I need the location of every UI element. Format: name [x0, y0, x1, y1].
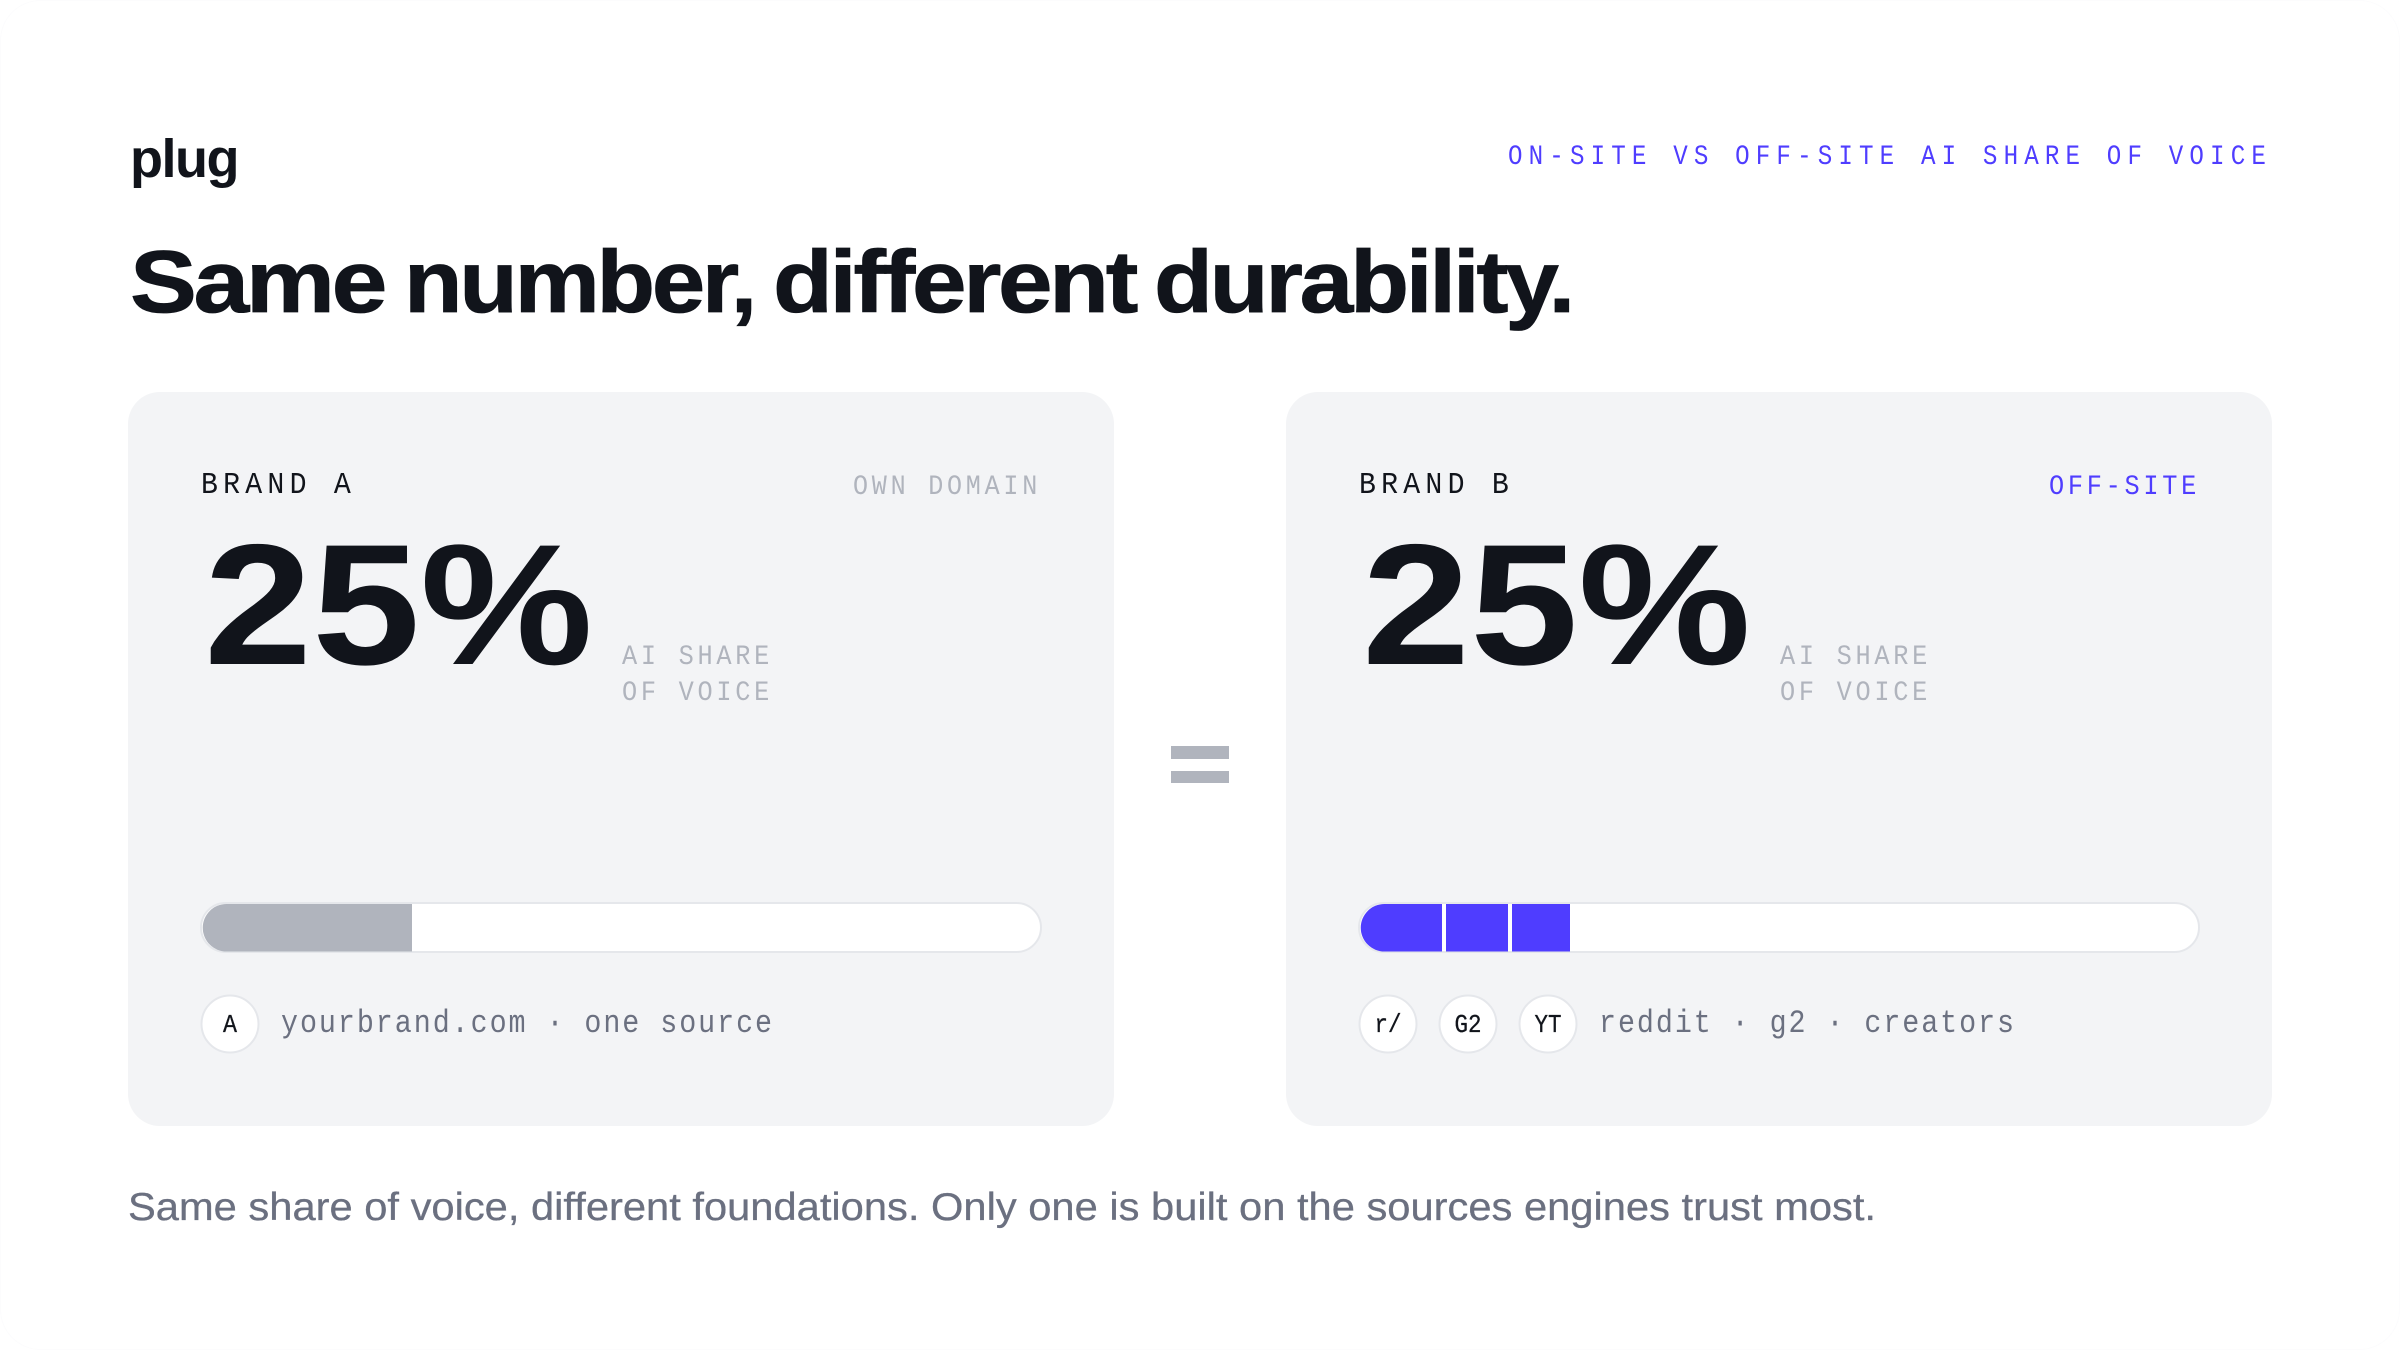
brand A progress bar	[201, 903, 1041, 952]
brand A source chip: A: A	[223, 1010, 237, 1040]
brand B value: 25%	[1362, 509, 1751, 701]
brand B source chip: G2: G2	[1454, 1010, 1482, 1040]
title: durability.	[1154, 232, 1572, 331]
brand A source tag: OWN DOMAIN	[853, 472, 1041, 503]
brand B source tag: OFF-SITE	[2049, 472, 2200, 503]
title: different	[773, 232, 1138, 331]
brand B source chip: YT: YT	[1534, 1010, 1562, 1040]
panel: brand A	[128, 392, 1114, 1126]
brand B source chip: reddit	[1360, 996, 1416, 1052]
brand B source chip: reddit: r/	[1374, 1010, 1402, 1040]
brand B value caption: AI SHARE	[1780, 642, 1931, 673]
brand A value caption	[622, 642, 773, 709]
brand A label: BRAND A	[201, 468, 356, 503]
brand B value caption: OF VOICE	[1780, 678, 1931, 709]
panel: brand B	[1286, 392, 2272, 1126]
brand B value caption	[1780, 642, 1931, 709]
footnote: Same share of voice, different foundations. Only one is built on the sources engines trust most.	[128, 1186, 1876, 1229]
title: Same	[130, 232, 384, 331]
title	[130, 232, 1572, 331]
brand B source text: reddit · g2 · creators	[1599, 1005, 2016, 1042]
brand A source text: yourbrand.com · one source	[281, 1005, 774, 1042]
brand A value caption: OF VOICE	[622, 678, 773, 709]
brand A value caption: AI SHARE	[622, 642, 773, 673]
brand B source chip: YT	[1520, 996, 1576, 1052]
logo: plug: plug	[130, 129, 238, 189]
brand A value: 25%	[204, 509, 593, 701]
header tag: ON-SITE VS OFF-SITE AI SHARE OF VOICE	[1508, 142, 2272, 173]
brand B source chip: G2	[1440, 996, 1496, 1052]
title: number,	[404, 232, 754, 331]
brand A source chip: A	[202, 996, 258, 1052]
equals sign	[1171, 746, 1229, 783]
brand B label: BRAND B	[1359, 468, 1514, 503]
brand B progress bar	[1359, 903, 2199, 952]
